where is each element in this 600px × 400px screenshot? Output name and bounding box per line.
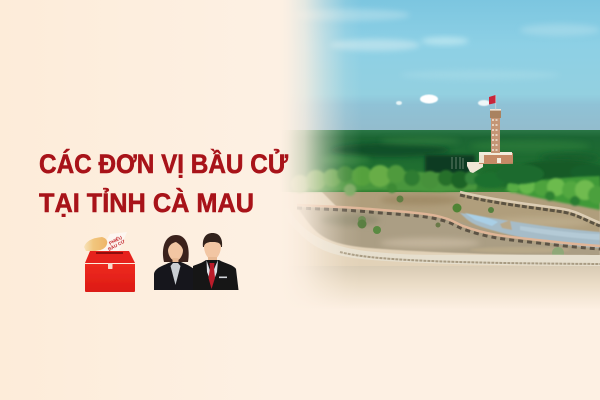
title line 2: TẠI TỈNH CÀ MAU	[39, 186, 254, 218]
ballot paper: BẦU CỬ	[107, 238, 126, 252]
upper mudflat	[320, 190, 600, 250]
hand	[84, 237, 107, 251]
dark trees behind	[480, 160, 600, 187]
dark clearing with trunks	[425, 155, 475, 174]
icon: ballot box with hand	[84, 232, 135, 292]
title	[39, 147, 289, 218]
man	[193, 233, 238, 290]
sea wall	[285, 208, 600, 266]
ballot paper: PHIẾU	[108, 234, 123, 246]
box lid	[85, 251, 135, 263]
ground base	[280, 188, 600, 268]
tower shaft	[491, 116, 500, 153]
bright foreground trees	[504, 176, 600, 210]
box body	[85, 264, 135, 292]
base front	[479, 153, 513, 164]
woman	[154, 235, 197, 290]
slot	[96, 252, 123, 254]
inner tidal flat	[297, 207, 600, 256]
water pools	[460, 213, 600, 248]
boardwalks	[297, 192, 600, 249]
fade to page on left	[280, 0, 362, 311]
mangrove shrubs	[358, 196, 564, 259]
icon: man and woman in suits	[154, 233, 238, 290]
tower crown	[490, 110, 501, 118]
photo: Ca Mau cape landscape with flag tower	[280, 0, 600, 311]
tan shadow below sea wall	[280, 266, 600, 310]
right-side mangrove	[480, 160, 600, 210]
green forest band	[280, 130, 600, 196]
sky with clouds	[280, 0, 600, 131]
flag	[489, 95, 496, 104]
bright foreground bushes	[290, 165, 480, 196]
ballot paper	[100, 232, 127, 258]
lock	[108, 263, 112, 269]
flag tower monument	[467, 95, 513, 173]
base wing	[467, 162, 483, 173]
trees in front of monument	[474, 164, 544, 188]
upper boardwalk	[460, 192, 600, 226]
flag pole	[494, 95, 497, 110]
lower boardwalk	[297, 205, 600, 249]
title line 1: CÁC ĐƠN VỊ BẦU CỬ	[39, 147, 289, 179]
